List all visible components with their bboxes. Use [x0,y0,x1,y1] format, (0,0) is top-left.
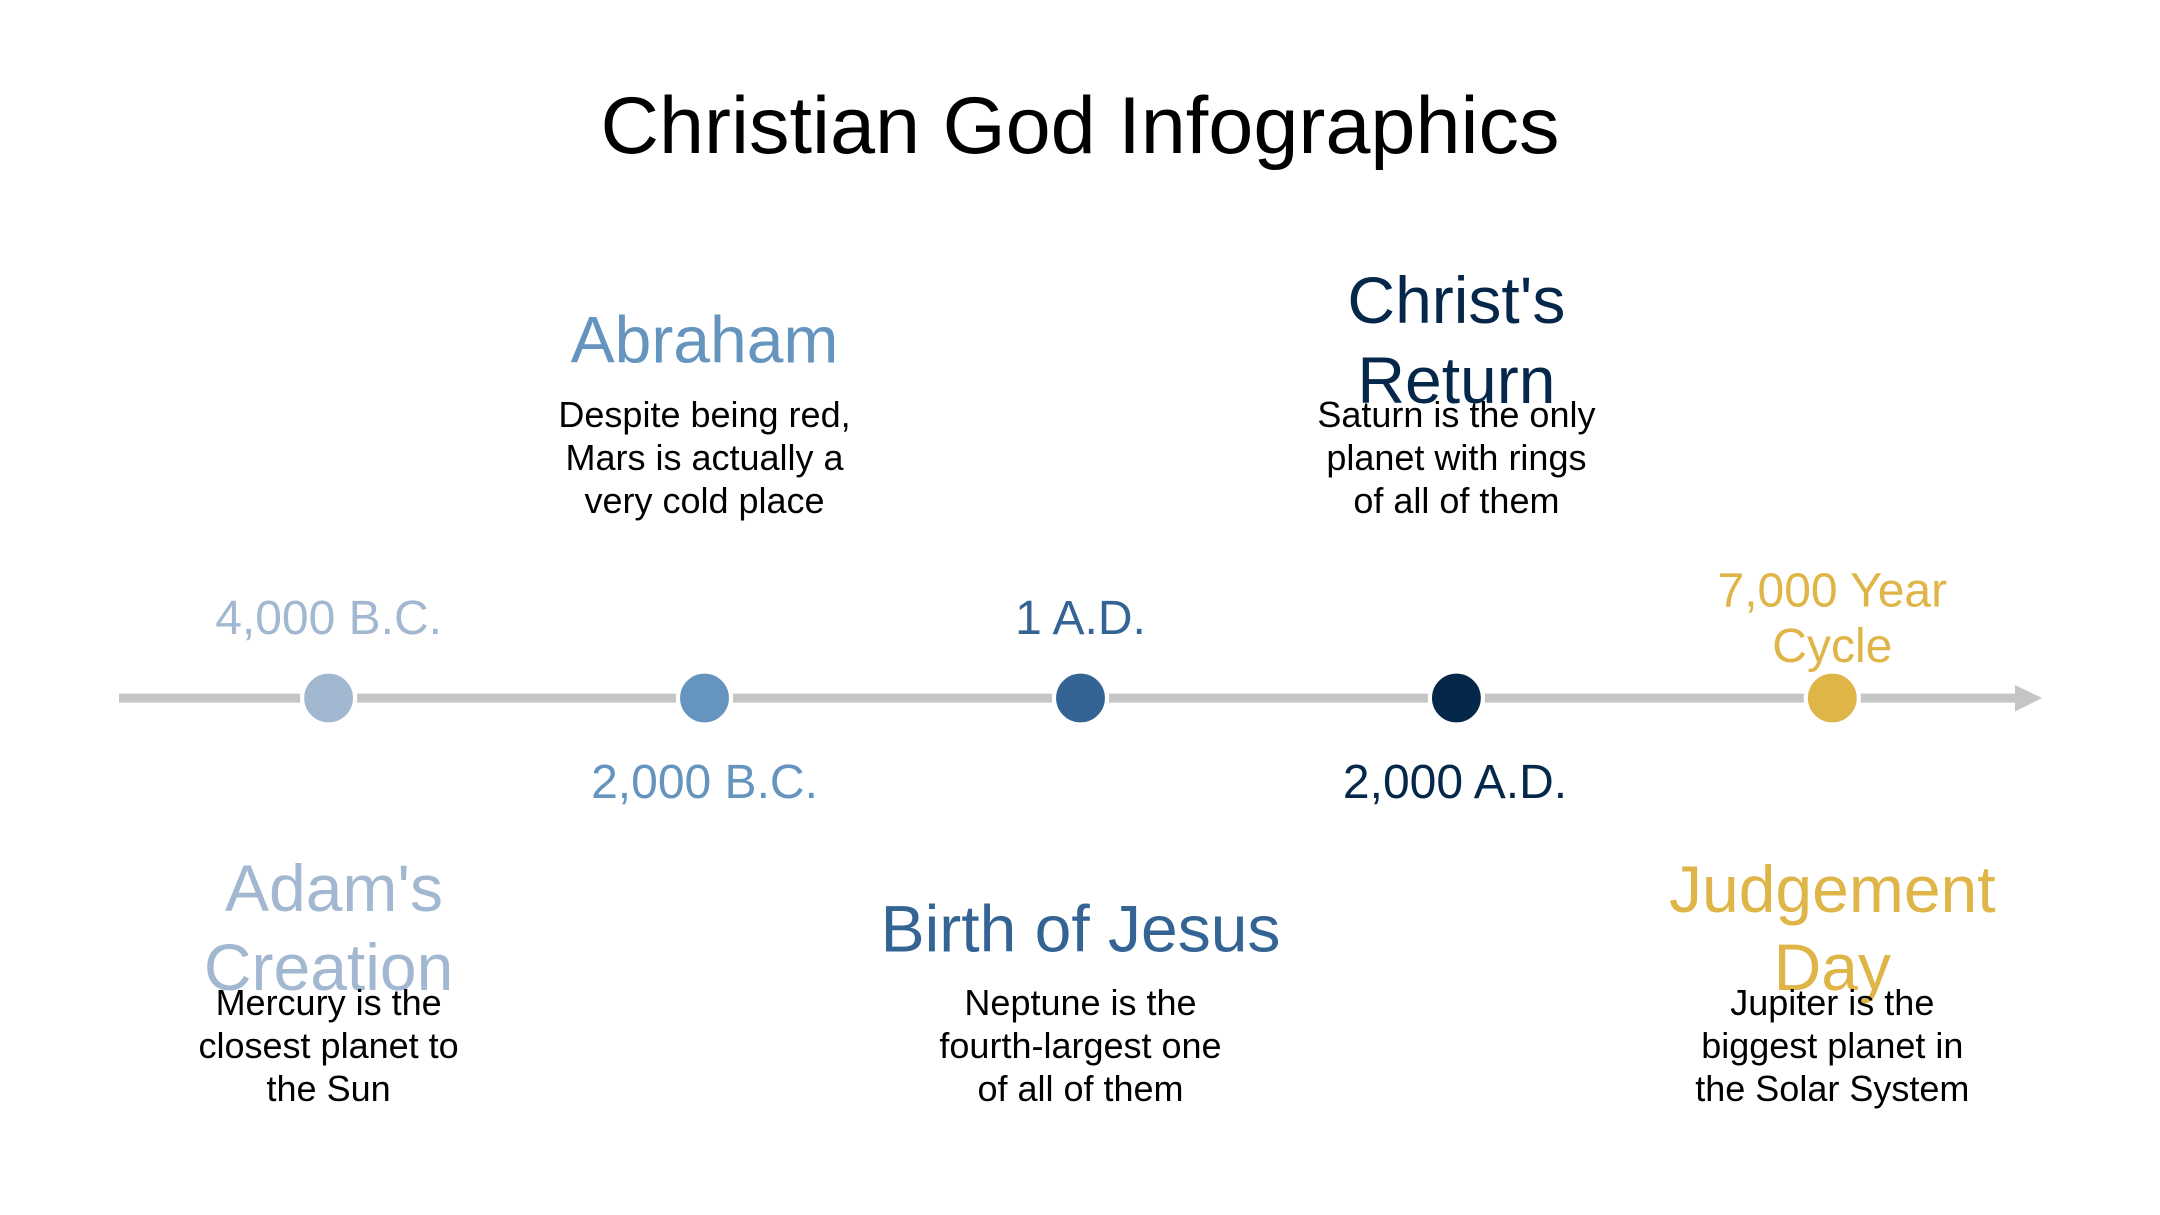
text: Neptune: Neptune is the [964,982,1197,1023]
text: Mercury: Mercury is the [216,982,442,1023]
panel: Abraham [558,302,851,809]
text: Mercury: the Sun [267,1068,391,1109]
text: Jupiter: Jupiter is the [1730,982,1934,1023]
title: Christian God Infographics [600,81,1560,171]
date: 7,000 Year Cycle: Cycle [1772,620,1892,673]
marker: 7,000 Year Cycle [1806,672,1859,724]
heading: Birth of Jesus: Birth of Jesus [881,892,1280,966]
timeline arrow [119,685,2042,712]
text: Saturn: planet with rings [1326,437,1586,478]
text: Jupiter: biggest planet in [1701,1025,1963,1066]
heading: Christ's Return: Christ's [1347,263,1565,337]
panel: Judgement Day [1669,564,1996,1109]
text: Saturn: of all of them [1353,480,1559,521]
text: Neptune: fourth-largest one [939,1025,1222,1066]
panel: Adam's Creation [199,592,459,1109]
panel: Christ's Return [1317,263,1595,809]
text: Mars: Despite being red, [558,394,851,435]
text: Mars: very cold place [584,480,825,521]
heading: Adam's Creation: Creation [204,930,453,1004]
date: 7,000 Year Cycle: 7,000 Year [1718,564,1947,618]
panel: Birth of Jesus [881,592,1280,1109]
heading: Adam's Creation: Adam's [225,851,443,925]
heading: Judgement Day: Day [1774,930,1891,1004]
date: 1 A.D.: 1 A.D. [1015,592,1146,645]
heading: Christ's Return: Return [1357,343,1555,417]
marker: 1 A.D. [1054,672,1107,724]
marker: 4,000 B.C. [302,672,355,724]
heading: Abraham: Abraham [571,302,838,376]
marker: 2,000 A.D. [1430,672,1483,724]
date: 2,000 B.C.: 2,000 B.C. [591,756,818,809]
date: 4,000 B.C.: 4,000 B.C. [215,592,442,645]
text: Jupiter: the Solar System [1695,1068,1969,1109]
text: Neptune: of all of them [977,1068,1184,1109]
text: Saturn: Saturn is the only [1317,394,1595,435]
heading: Judgement Day: Judgement [1669,852,1996,926]
date: 2,000 A.D.: 2,000 A.D. [1343,756,1567,809]
marker: 2,000 B.C. [678,672,731,724]
text: Mercury: closest planet to [199,1025,459,1066]
text: Mars: Mars is actually a [565,437,845,478]
